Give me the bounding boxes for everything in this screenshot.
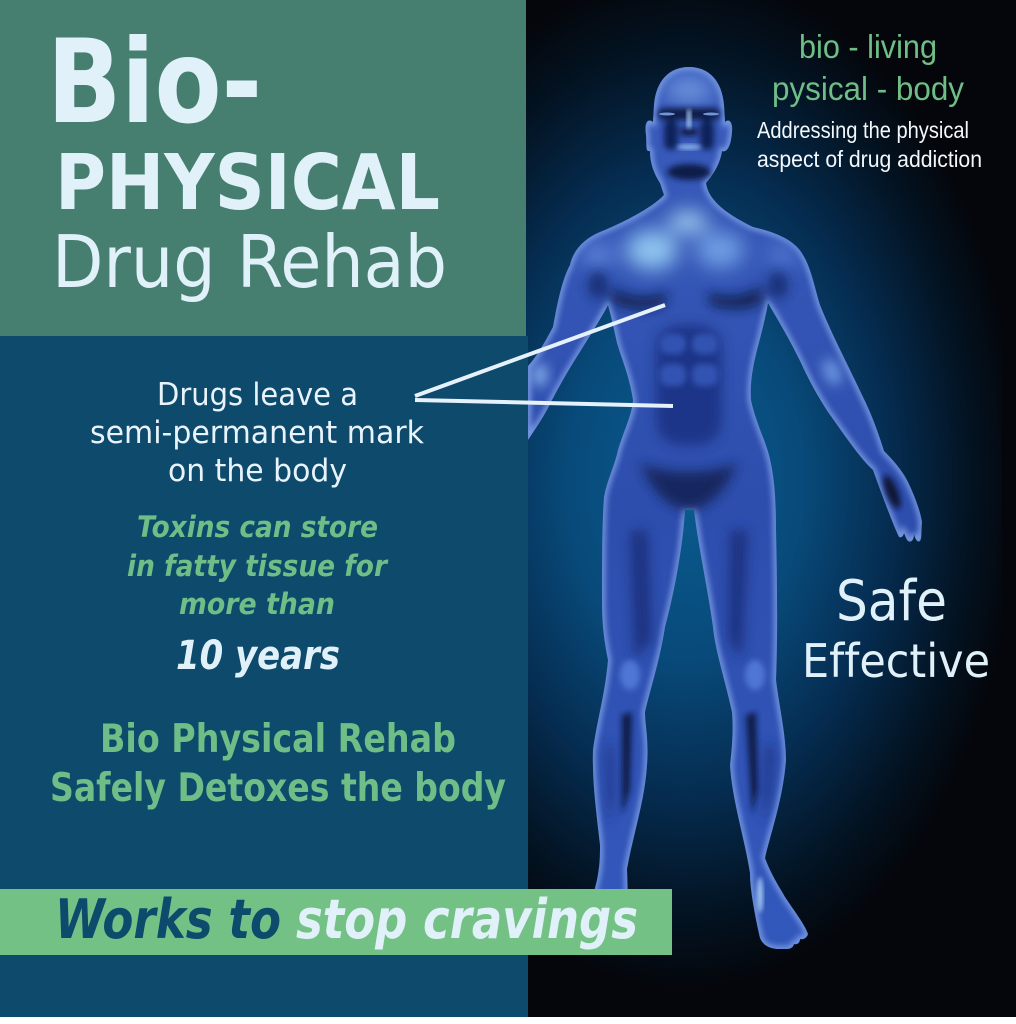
text block: addressing the physical aspect: aspect of drug addiction bbox=[757, 146, 982, 172]
face detail bbox=[659, 110, 719, 150]
text block: toxins in fatty tissue: more than bbox=[179, 587, 335, 621]
stat: 10 years: 10 years bbox=[176, 633, 340, 679]
foot highlight bbox=[757, 877, 763, 913]
text block: safe and effective: Effective bbox=[802, 634, 990, 688]
text block: detox statement: Bio Physical Rehab bbox=[100, 717, 456, 762]
text block: addressing the physical aspect: Addressing the physical bbox=[757, 117, 969, 143]
definition: bio and physical: bio - living bbox=[799, 28, 937, 65]
chest highlights bbox=[582, 78, 796, 270]
text block: safe and effective bbox=[802, 569, 990, 688]
text block: toxins in fatty tissue bbox=[127, 510, 389, 621]
banner: works to stop cravings: stop cravings bbox=[296, 888, 638, 951]
title line: PHYSICAL: PHYSICAL bbox=[55, 139, 440, 228]
title line: Drug Rehab: Drug Rehab bbox=[52, 220, 447, 304]
text block: safe and effective: Safe bbox=[836, 569, 947, 634]
text block: drugs leave a mark bbox=[90, 377, 424, 489]
dark muscle shadows bbox=[588, 271, 788, 309]
title: Bio-Physical Drug Rehab bbox=[47, 15, 447, 304]
definition: bio and physical bbox=[772, 28, 964, 107]
text block: toxins in fatty tissue: Toxins can store bbox=[137, 510, 378, 544]
rim light bbox=[528, 67, 922, 949]
panel: teal title block bbox=[0, 0, 526, 336]
text block: drugs leave a mark: Drugs leave a bbox=[157, 377, 358, 413]
groin shadow bbox=[640, 462, 738, 510]
hand and arm shading bbox=[880, 473, 904, 511]
definition: bio and physical: pysical - body bbox=[772, 70, 964, 107]
panel: navy information block bbox=[0, 336, 528, 1017]
banner: works to stop cravings bbox=[0, 888, 672, 955]
abdomen bbox=[656, 325, 722, 445]
text block: addressing the physical aspect bbox=[757, 117, 982, 172]
panel: dark figure background bbox=[526, 0, 1016, 1017]
banner: works to stop cravings: Works to bbox=[55, 888, 281, 951]
text block: drugs leave a mark: semi-permanent mark bbox=[90, 415, 424, 451]
illustration: human figure bbox=[528, 67, 922, 949]
text block: detox statement bbox=[50, 717, 506, 811]
callout: pointer lines to the body bbox=[415, 305, 673, 406]
text block: detox statement: Safely Detoxes the body bbox=[50, 766, 506, 811]
text block: drugs leave a mark: on the body bbox=[168, 453, 347, 489]
title line: Bio-: Bio- bbox=[47, 15, 262, 150]
text block: toxins in fatty tissue: in fatty tissue for bbox=[127, 549, 389, 583]
leg shading bbox=[606, 530, 774, 825]
